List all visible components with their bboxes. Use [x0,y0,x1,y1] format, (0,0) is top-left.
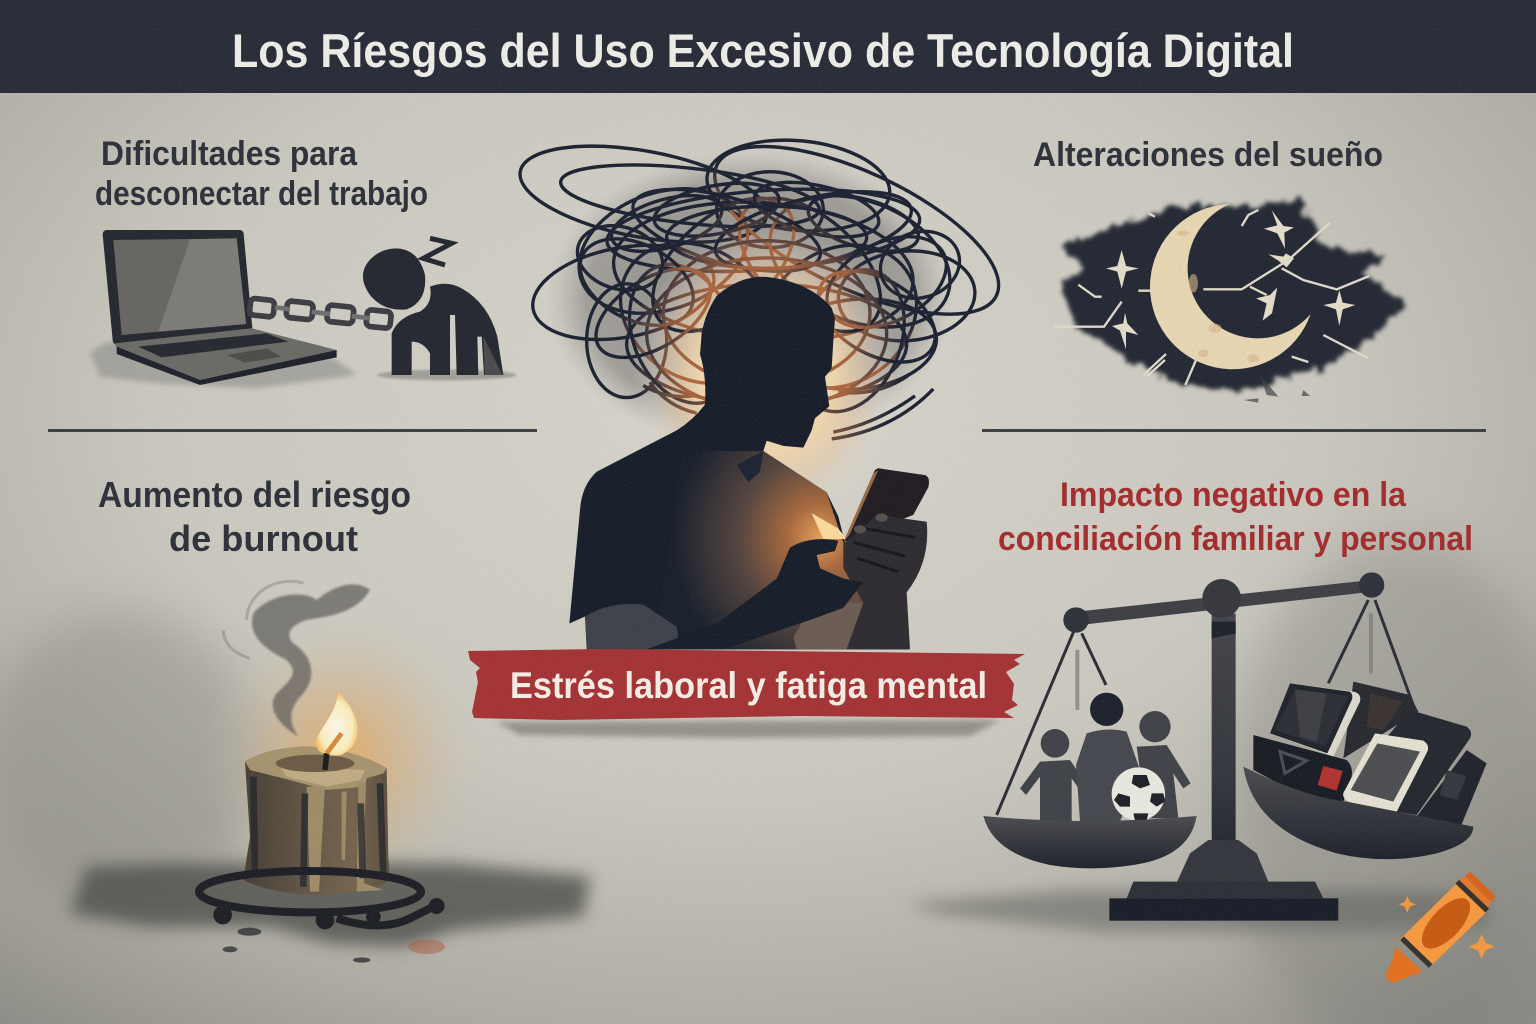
heading: sleep disruption: Alteraciones del sueño [1033,136,1383,174]
back hand [843,513,927,649]
central figure [513,112,1020,649]
beam and post [1063,572,1384,921]
spark of light [812,513,847,539]
title: Los Ríesgos del Uso Excesivo de Tecnología Digital [232,24,1294,77]
chain links [249,298,391,329]
heading: burnout: de burnout [169,518,358,559]
front arm and hand [647,539,863,649]
icon: burnt-out candle [70,581,590,963]
hanging cords [997,600,1415,815]
heading: burnout: Aumento del riesgo [98,474,411,515]
shirt light [585,451,863,649]
stacked devices [1253,682,1487,828]
family and ball [1020,693,1191,822]
phone [843,468,929,542]
smoke [223,581,370,737]
icon: crayon logo [1385,872,1496,983]
neck shadow [737,451,763,482]
right pan [1243,767,1473,859]
scribble of tangled thoughts [513,112,1020,439]
flame [315,692,358,756]
divider left [48,429,537,432]
heading: family impact: conciliación familiar y personal [998,520,1473,558]
lower corner shading [0,540,1536,1024]
left pan [983,816,1197,868]
banner: central stress label: Estrés laboral y fatiga mental [510,665,987,706]
heading: family impact [998,476,1473,558]
candle body [243,747,390,895]
icon: laptop chained to sleeping person [90,230,517,388]
heading: disconnect from work [95,135,428,213]
divider right [982,429,1486,432]
icon: cracked moon and stars [1053,198,1405,403]
heading: family impact: Impacto negativo en la [1060,476,1407,514]
heading: burnout [98,474,411,559]
heading: disconnect from work: Dificultades para [101,135,358,173]
heading: disconnect from work: desconectar del trabajo [95,175,428,213]
candle stand [199,871,437,925]
ink splatters [223,928,370,963]
silhouette head and torso [569,277,910,649]
icon: balance scale [907,572,1487,932]
banner: central stress label [468,649,1025,738]
title bar [0,0,1536,93]
